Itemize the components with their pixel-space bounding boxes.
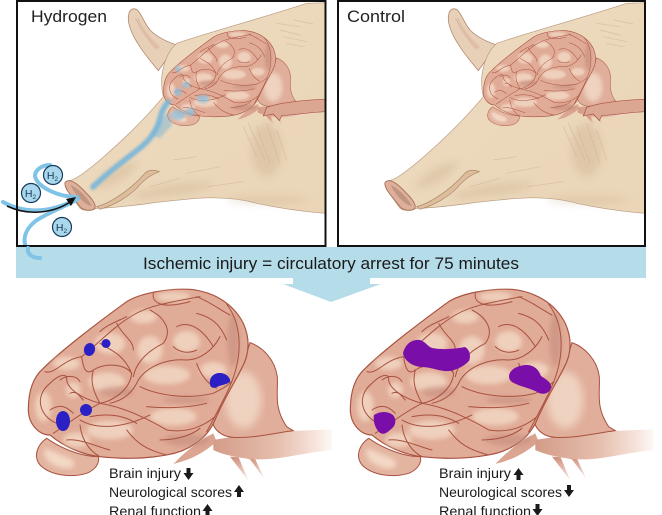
band: ischemic injury [16,247,646,278]
H2 molecule labels: H [47,170,54,182]
arrow icons [514,468,574,515]
outcomes: control: Brain injury [439,465,511,481]
blue gas swirls [3,165,78,257]
panel border [338,1,645,246]
pig head with brain: control [385,3,645,213]
outcomes: control: Neurological scores [439,484,562,500]
H2 molecule labels: 2 [32,194,36,201]
H2 molecule labels: H [56,222,63,234]
panel: hydrogen [3,1,326,257]
heading: Hydrogen: Hydrogen [31,8,107,26]
panel border [17,1,326,246]
outcomes: hydrogen [109,465,244,515]
outcomes: hydrogen: Brain injury [109,465,181,481]
band text: Ischemic injury = circulatory arrest for 75 minutes [143,255,519,273]
pig head with brain: hydrogen [65,3,325,213]
outcomes: hydrogen: Neurological scores [109,484,232,500]
hydrogen gas distribution in snout and brain [93,66,209,187]
panel: control [338,1,645,246]
brain: hydrogen [28,289,332,481]
H2 molecule labels [22,166,72,236]
black arrow into nostril [7,197,76,212]
outcomes: control [439,465,574,515]
H2 molecule labels: 2 [63,228,67,235]
arrow icons [184,468,244,515]
swirl tail over band [28,248,40,258]
brain: control [350,289,654,481]
heading: Control: Control [347,8,405,26]
H2 molecule labels: 2 [54,176,58,183]
H2 molecule labels: H [25,188,32,200]
purple injury regions [374,340,551,434]
blue injury spots [56,339,230,431]
arrow down to brains [283,278,381,302]
